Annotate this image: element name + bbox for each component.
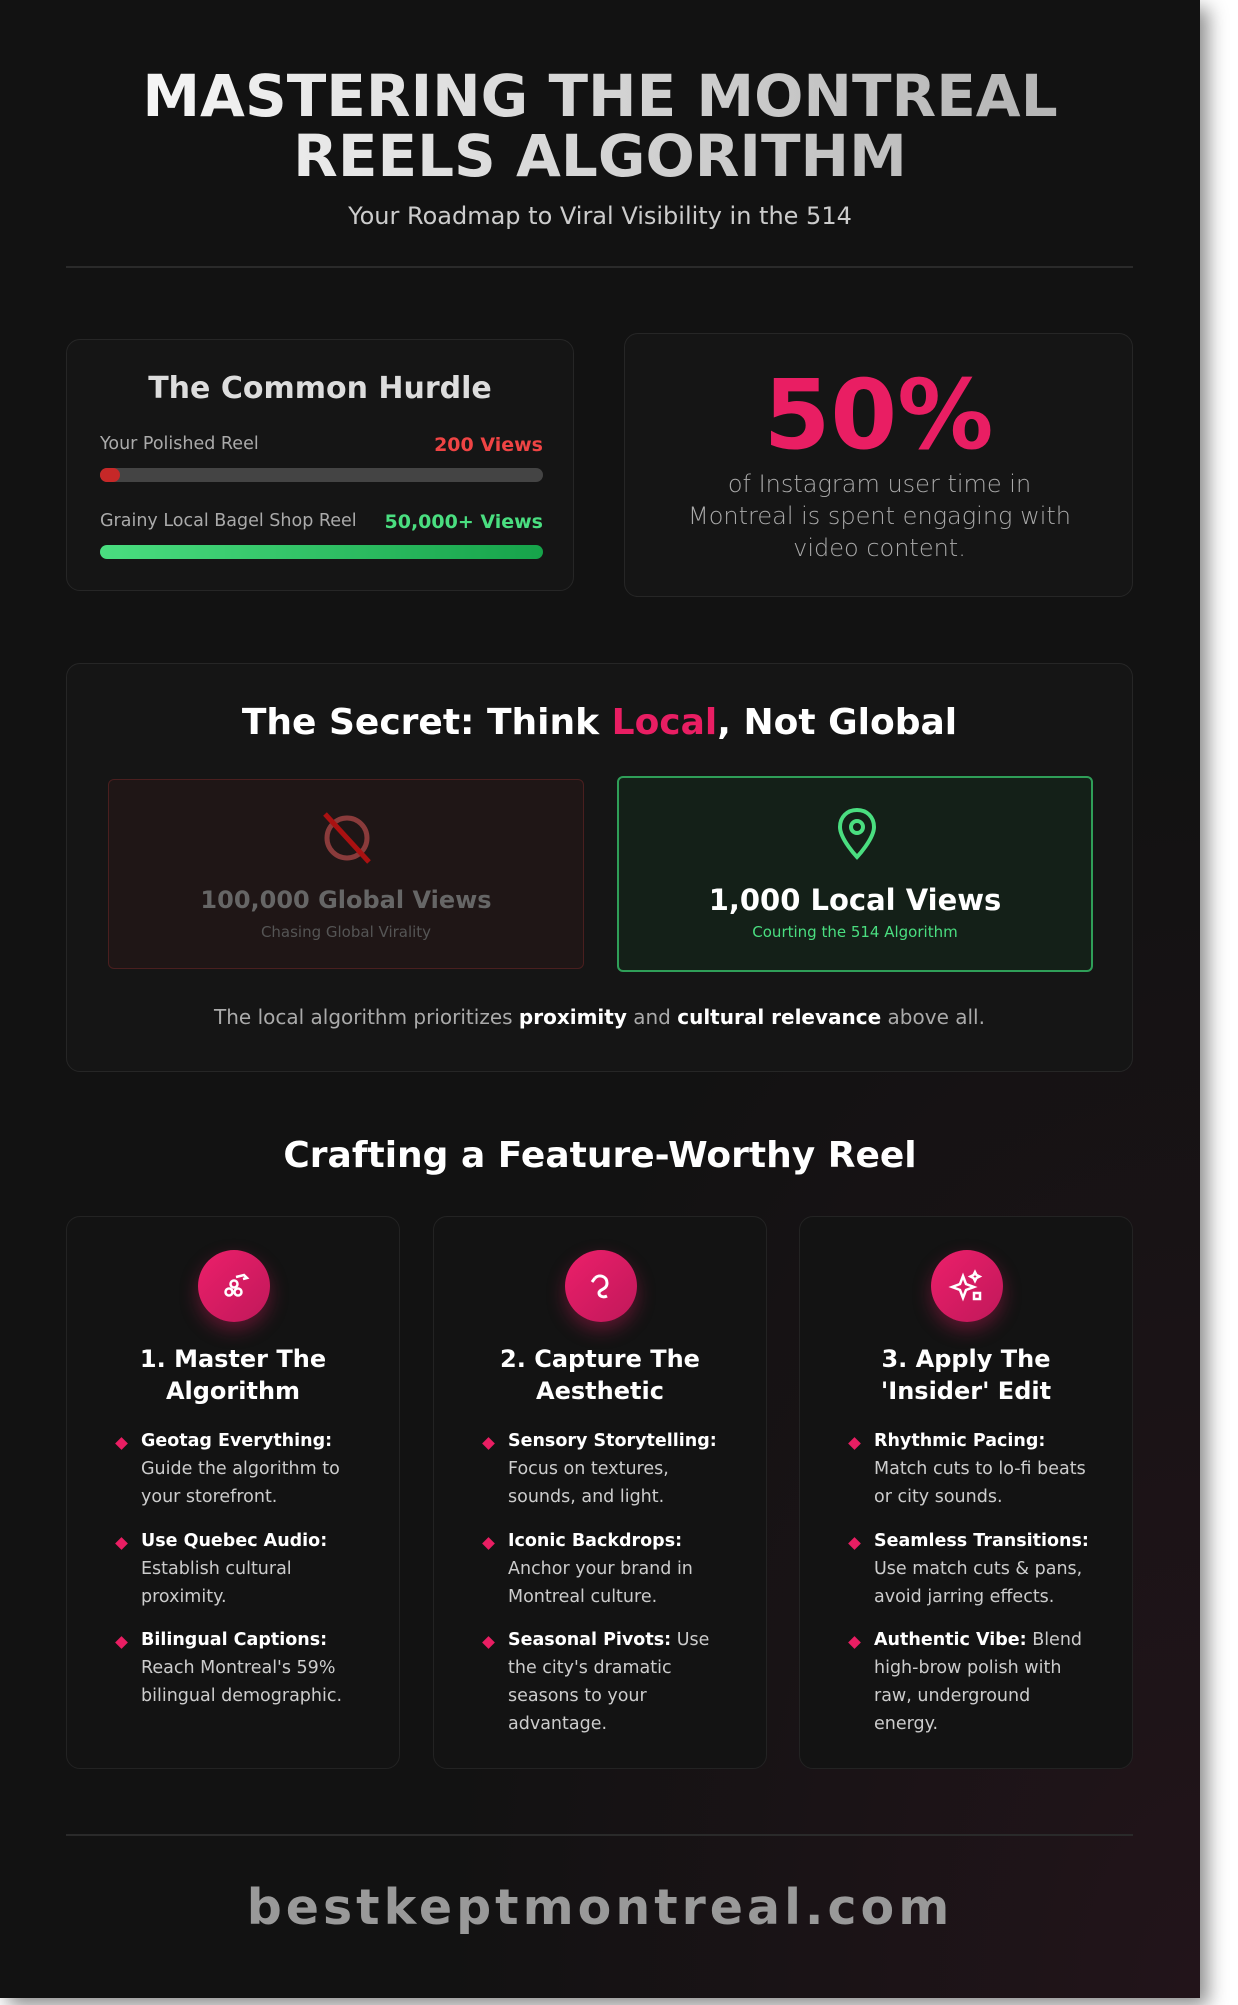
bar: bagel shop [100, 545, 543, 559]
label: bagel shop [100, 511, 543, 533]
stat text: of Instagram user time in Montreal is spent engaging with video content. [688, 470, 1071, 562]
icon: map pin [838, 808, 876, 860]
heading: insider edit: 'Insider' Edit [881, 1377, 1051, 1405]
heading: common hurdle: The Common Hurdle [148, 371, 492, 406]
card 1: Geotag Everything: [141, 1431, 332, 1451]
box: global views [108, 779, 584, 969]
label: polished reel: 200 Views [434, 434, 543, 456]
heading: master algorithm: Algorithm [166, 1377, 300, 1405]
card 2: Sensory Storytelling: [508, 1431, 717, 1451]
card 3 [799, 1216, 1133, 1769]
subtitle: Your Roadmap to Viral Visibility in the 514 [348, 202, 852, 230]
card 1: Reach Montreal's 59% bilingual demographic. [141, 1658, 342, 1706]
heading: secret: The Secret: Think Local, Not Global [242, 702, 957, 743]
card 2: Seasonal Pivots: Use the city's dramatic seasons to your advantage. [508, 1630, 709, 1734]
text: algorithm priority: The local algorithm prioritizes proximity and cultural relevance above all. [214, 1005, 985, 1029]
heading: master algorithm: 1. Master The [140, 1345, 326, 1373]
card 3: Use match cuts & pans, avoid jarring effects. [874, 1559, 1082, 1607]
card 1 [66, 1216, 400, 1769]
heading: master algorithm [140, 1345, 326, 1405]
card 1: Establish cultural proximity. [141, 1559, 292, 1607]
box: local views: Courting the 514 Algorithm [752, 923, 958, 941]
text: local views: 1,000 Local Views [709, 883, 1001, 917]
label: polished reel: Your Polished Reel [100, 434, 259, 454]
card 3: Rhythmic Pacing: [874, 1431, 1045, 1451]
card 1: Bilingual Captions: [141, 1630, 327, 1650]
heading: insider edit: 3. Apply The [881, 1345, 1051, 1373]
title: MASTERING THE MONTREAL [142, 62, 1058, 130]
text: global views: 100,000 Global Views [200, 886, 492, 914]
panel: common hurdle [66, 339, 574, 591]
icon: aesthetic [565, 1250, 637, 1322]
icon: algorithm [198, 1250, 270, 1322]
title [0, 66, 1200, 186]
box: global views: Chasing Global Virality [261, 923, 431, 941]
heading: capture aesthetic [500, 1345, 700, 1405]
icon: sparkles [931, 1250, 1003, 1322]
icon: crossed globe [323, 812, 371, 864]
heading: insider edit [881, 1345, 1051, 1405]
heading: capture aesthetic: Aesthetic [536, 1377, 664, 1405]
card 1: Use Quebec Audio: [141, 1531, 327, 1551]
card 2: Focus on textures, sounds, and light. [508, 1459, 669, 1507]
card 2 [433, 1216, 767, 1769]
card 3: Authentic Vibe: Blend high-brow polish with raw, underground energy. [874, 1630, 1082, 1734]
card 2: Iconic Backdrops: [508, 1531, 682, 1551]
bar: polished reel [100, 468, 543, 482]
title: REELS ALGORITHM [293, 122, 907, 190]
stat number: 50% [764, 359, 993, 471]
heading: capture aesthetic: 2. Capture The [500, 1345, 700, 1373]
box: local views [617, 776, 1093, 972]
panel: 50% stat [624, 333, 1133, 597]
label: polished reel [100, 434, 543, 456]
label: bagel shop: 50,000+ Views [384, 511, 543, 533]
footer: website: bestkeptmontreal.com [247, 1879, 953, 1936]
panel: secret local [66, 663, 1133, 1072]
card 2: Anchor your brand in Montreal culture. [508, 1559, 693, 1607]
label: bagel shop: Grainy Local Bagel Shop Reel [100, 511, 357, 531]
card 3: Seamless Transitions: [874, 1531, 1089, 1551]
heading: crafting: Crafting a Feature-Worthy Reel [283, 1135, 917, 1176]
card 1: Guide the algorithm to your storefront. [141, 1459, 340, 1507]
card 3: Match cuts to lo-fi beats or city sounds. [874, 1459, 1086, 1507]
